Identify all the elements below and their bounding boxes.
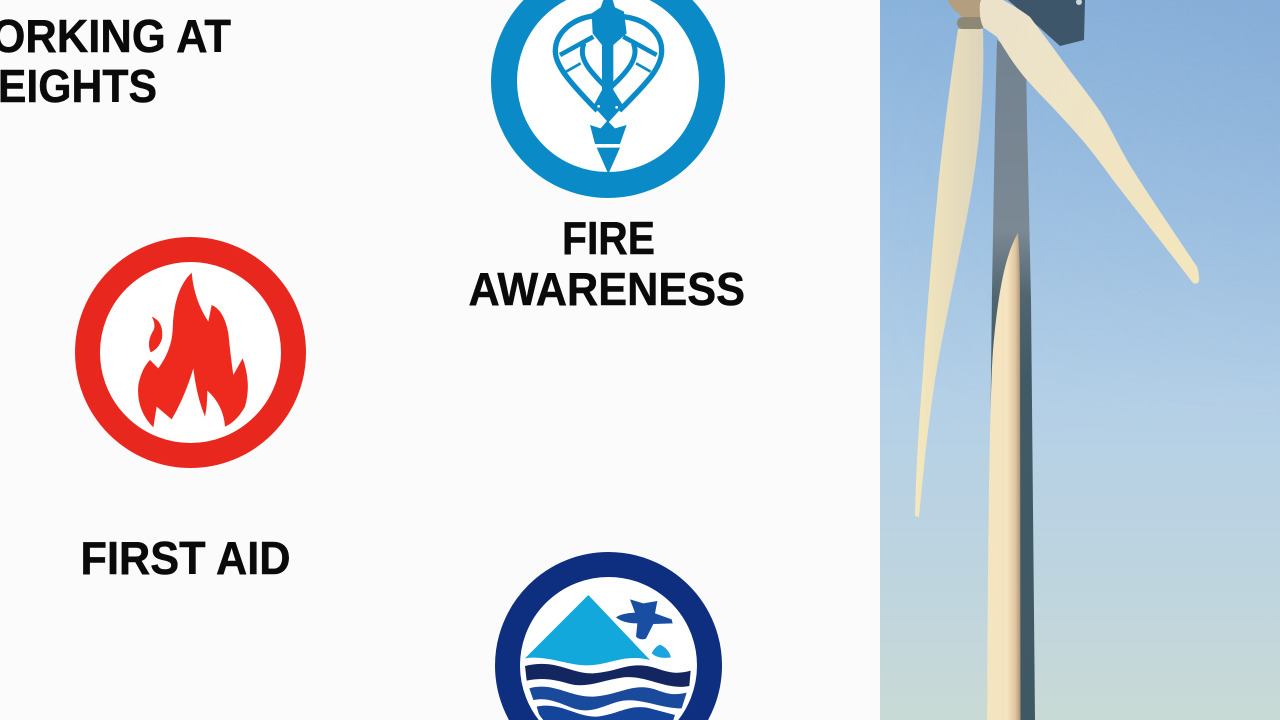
label: fire awareness	[468, 212, 745, 315]
icon: blue balloon badge	[504, 0, 712, 185]
photo: sky background	[880, 0, 1280, 720]
heading: working at heights	[0, 10, 231, 112]
tower	[987, 40, 1035, 720]
icon: navy sea badge	[508, 564, 710, 720]
label: first aid: FIRST AID	[80, 532, 290, 584]
label: fire awareness: AWARENESS	[468, 263, 745, 315]
blade: lower left	[915, 29, 983, 517]
blade: diagonal right	[980, 0, 1199, 284]
left white panel	[0, 0, 880, 720]
rotor hub	[948, 0, 985, 29]
label: fire awareness: FIRE	[562, 212, 655, 264]
icon: red flame badge	[88, 250, 294, 456]
photo: wind turbine	[915, 0, 1199, 720]
nacelle	[1008, 0, 1085, 46]
